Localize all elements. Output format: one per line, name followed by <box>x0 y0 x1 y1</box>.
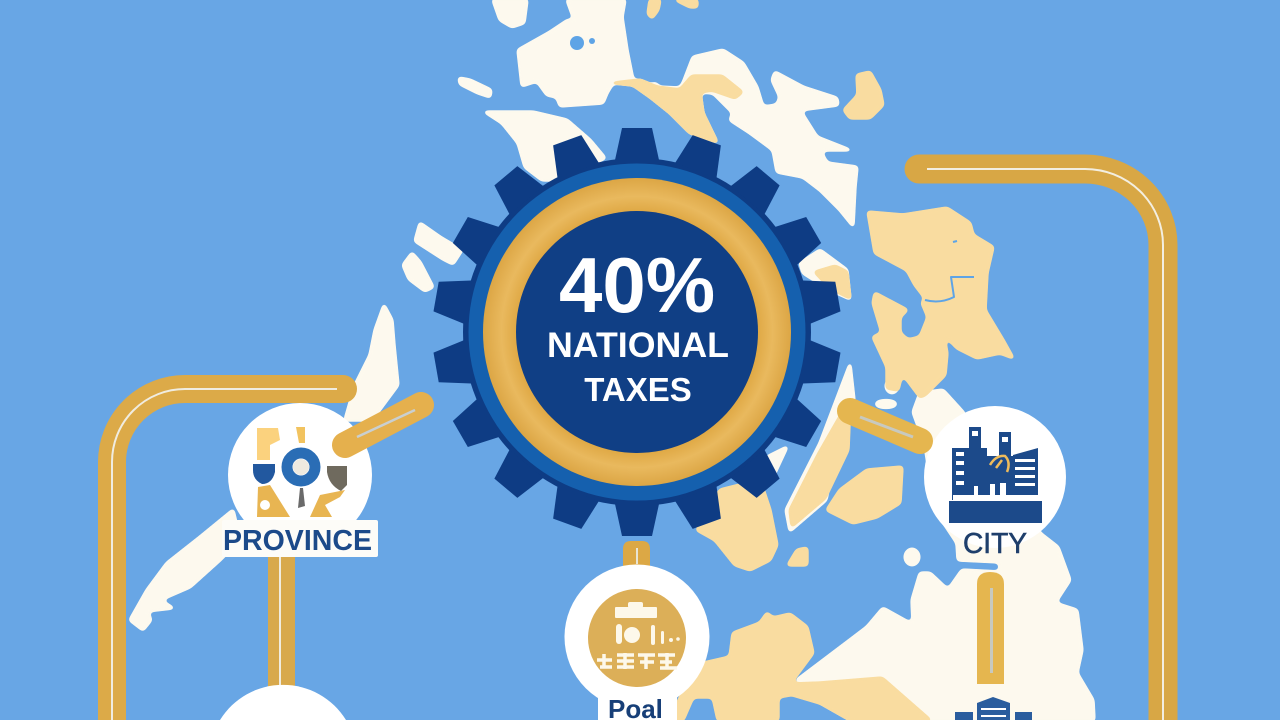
icon: province emblem <box>253 427 347 517</box>
label: national: NATIONAL <box>547 326 729 365</box>
connector: gear to city <box>850 411 920 441</box>
node: city <box>924 406 1066 560</box>
gear: 40% national taxes <box>432 128 842 536</box>
node: pool <box>564 564 710 720</box>
icon: lower right building <box>955 697 1032 720</box>
navy centre <box>516 211 758 453</box>
connector: city to lower node <box>977 572 1004 684</box>
label: province: PROVINCE <box>223 525 372 557</box>
node: lower left circle <box>220 685 346 720</box>
label: taxes: TAXES <box>584 371 692 408</box>
value: 40%: 40% <box>559 241 715 329</box>
connector: gear to province <box>345 405 421 445</box>
connector: province to lower node <box>268 555 295 690</box>
gold ring <box>483 178 791 486</box>
connector: right gold pipe <box>904 154 1163 720</box>
connector: left gold pipe <box>112 375 357 720</box>
map: inland water <box>570 36 974 301</box>
label: city: CITY <box>963 528 1027 560</box>
connector: gear to pool <box>623 541 650 566</box>
map: archipelago <box>130 0 1094 720</box>
icon: city skyline <box>949 427 1042 523</box>
gear teeth <box>432 128 842 536</box>
blue ring <box>468 164 806 500</box>
node: province <box>222 403 378 557</box>
icon: pool emblem <box>588 589 686 687</box>
label background: province <box>222 520 378 557</box>
